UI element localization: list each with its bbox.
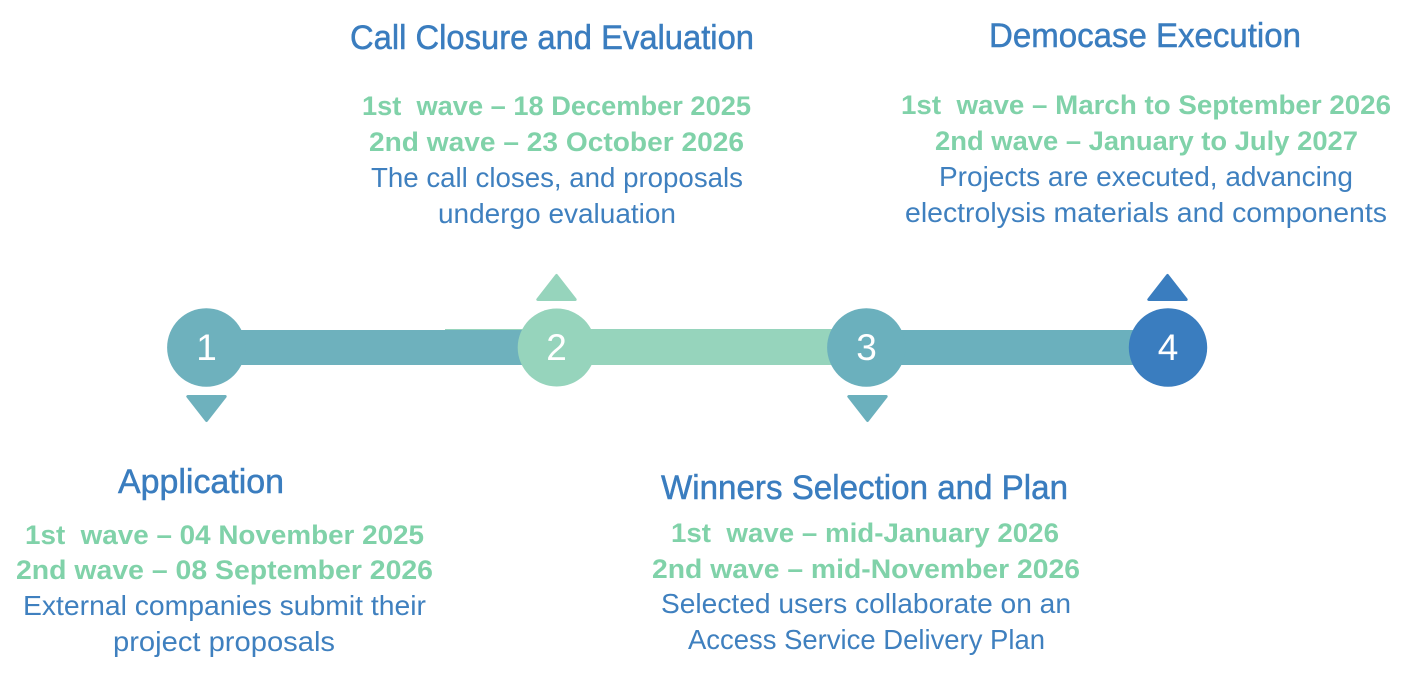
step 1 marker: 1 — [196, 327, 217, 368]
dates and description: 2nd wave – January to July 2027 — [935, 126, 1358, 156]
dates and description: 2nd wave – mid-November 2026 — [652, 554, 1080, 584]
text block: Democase Execution — [901, 17, 1391, 228]
arrow: step 4 up — [1149, 276, 1186, 300]
dates and description: 1st wave – 04 November 2025 — [25, 520, 424, 550]
heading: Winners Selection and Plan — [661, 469, 1068, 507]
connector bar: step 3 to 4 — [866, 330, 1168, 365]
dates and description: Selected users collaborate on an — [661, 588, 1071, 619]
step 3 marker — [827, 308, 906, 387]
dates and description — [16, 520, 433, 657]
dates and description: 2nd wave – 08 September 2026 — [16, 555, 433, 585]
dates and description: External companies submit their — [23, 590, 426, 621]
timeline graphic — [167, 276, 1207, 420]
connector bar: step 1 to 2 — [206, 330, 557, 365]
text block: Winners Selection and Plan — [652, 469, 1080, 655]
step 1 marker — [167, 308, 246, 387]
dates and description: The call closes, and proposals — [371, 162, 743, 193]
step 3 marker: 3 — [856, 327, 877, 368]
dates and description: project proposals — [113, 626, 335, 657]
step 2 marker: 2 — [546, 327, 567, 368]
dates and description: electrolysis materials and components — [905, 197, 1387, 228]
text block: Application — [16, 463, 433, 657]
dates and description: 1st wave – mid-January 2026 — [671, 518, 1059, 548]
dates and description: Access Service Delivery Plan — [688, 624, 1045, 655]
dates and description: 2nd wave – 23 October 2026 — [369, 127, 744, 157]
step 4 marker — [1129, 308, 1207, 387]
heading: Application — [118, 463, 284, 501]
dates and description: Projects are executed, advancing — [939, 161, 1353, 192]
heading: Democase Execution — [989, 17, 1301, 55]
step 4 marker: 4 — [1158, 327, 1178, 368]
arrow: step 2 up — [538, 276, 575, 300]
text block: Call Closure and Evaluation — [350, 19, 754, 229]
arrow: step 1 down — [188, 396, 225, 420]
dates and description — [652, 518, 1080, 655]
connector bar: green segment — [445, 329, 835, 365]
dates and description — [901, 90, 1391, 228]
step 2 marker — [518, 308, 596, 386]
arrow: step 3 down — [849, 396, 886, 420]
dates and description: undergo evaluation — [438, 198, 676, 229]
heading: Call Closure and Evaluation — [350, 19, 754, 57]
dates and description — [362, 91, 751, 229]
dates and description: 1st wave – March to September 2026 — [901, 90, 1391, 120]
dates and description: 1st wave – 18 December 2025 — [362, 91, 751, 121]
